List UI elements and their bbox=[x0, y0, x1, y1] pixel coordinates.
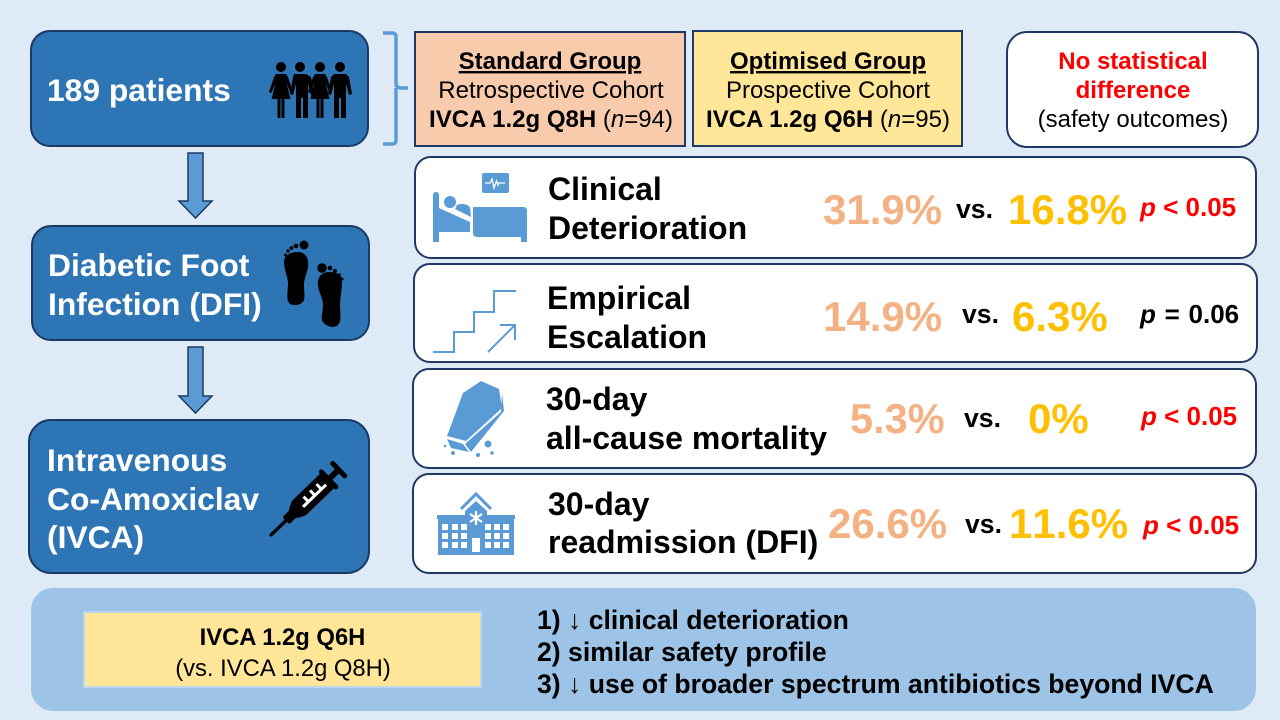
icon: footprints bbox=[284, 240, 344, 327]
label: clinical deterioration: Clinical bbox=[548, 171, 662, 207]
value: optimised: 0% bbox=[1028, 395, 1089, 442]
vs: vs. bbox=[964, 403, 1001, 433]
value: optimised: 11.6% bbox=[1009, 500, 1128, 547]
icon: coffin bbox=[444, 381, 504, 457]
label: 189 patients: 189 patients bbox=[47, 72, 231, 108]
label: intravenous co-amoxiclav: Co-Amoxiclav bbox=[47, 481, 259, 517]
panel: safety outcomes bbox=[1007, 32, 1258, 147]
label: intravenous co-amoxiclav: Intravenous bbox=[47, 442, 227, 478]
text: conclusions list: 1) ↓ clinical deterioration bbox=[537, 605, 849, 635]
panel: optimised group bbox=[693, 31, 962, 146]
text: no statistical difference: difference bbox=[1076, 77, 1190, 104]
vs: vs. bbox=[962, 299, 999, 329]
icon: hospital building bbox=[437, 494, 515, 555]
icon: syringe bbox=[261, 459, 350, 545]
text: optimised group: Prospective Cohort bbox=[726, 77, 930, 104]
vs: vs. bbox=[956, 194, 993, 224]
brace: groups bbox=[383, 33, 408, 144]
text: standard group: Retrospective Cohort bbox=[438, 77, 664, 104]
icon: stairs with arrow bbox=[433, 291, 516, 352]
icon: group of people bbox=[269, 62, 352, 118]
p value: p < 0.05 bbox=[1142, 510, 1239, 540]
panel: standard group bbox=[415, 32, 685, 146]
panel: 30-day readmission bbox=[413, 474, 1256, 573]
label: diabetic foot infection: Infection (DFI) bbox=[48, 286, 262, 322]
text: conclusions list: 2) similar safety profile bbox=[537, 637, 827, 667]
panel: empirical escalation bbox=[414, 264, 1257, 362]
value: optimised: 16.8% bbox=[1008, 186, 1127, 233]
panel: 30-day mortality bbox=[413, 369, 1256, 468]
p value: p < 0.05 bbox=[1139, 192, 1236, 222]
value: standard: 31.9% bbox=[823, 186, 942, 233]
panel: clinical deterioration bbox=[415, 157, 1256, 258]
label: clinical deterioration: Deterioration bbox=[548, 210, 747, 246]
p value: p < 0.05 bbox=[1140, 401, 1237, 431]
label: 30-day all-cause mortality: all-cause mortality bbox=[546, 420, 827, 456]
value: standard: 5.3% bbox=[850, 395, 945, 442]
label: intravenous co-amoxiclav: (IVCA) bbox=[47, 519, 144, 555]
callout: IVCA 1.2g Q6H bbox=[84, 612, 481, 687]
panel: diabetic foot infection bbox=[32, 226, 369, 340]
panel: conclusion bbox=[31, 588, 1256, 711]
label: empirical escalation: Escalation bbox=[547, 319, 707, 355]
label: 30-day all-cause mortality: 30-day bbox=[546, 381, 648, 417]
value: optimised: 6.3% bbox=[1012, 293, 1108, 340]
text: standard group: IVCA 1.2g Q8H (n=94) bbox=[429, 106, 673, 133]
label: diabetic foot infection: Diabetic Foot bbox=[48, 247, 250, 283]
panel: 189 patients bbox=[31, 31, 368, 146]
p value: p = 0.06 bbox=[1139, 299, 1239, 329]
vs: vs. bbox=[965, 509, 1002, 539]
text: optimised group: Optimised Group bbox=[730, 48, 926, 75]
callout: IVCA 1.2g Q6H: IVCA 1.2g Q6H bbox=[200, 624, 365, 651]
panel: intravenous co-amoxiclav bbox=[29, 420, 369, 573]
text: no statistical difference: (safety outcomes) bbox=[1038, 106, 1228, 133]
text: no statistical difference: No statistical bbox=[1058, 48, 1208, 75]
value: standard: 14.9% bbox=[823, 293, 942, 340]
arrow: DFI to IVCA bbox=[179, 347, 212, 413]
label: empirical escalation: Empirical bbox=[547, 280, 691, 316]
arrow: patients to DFI bbox=[179, 153, 212, 218]
label: 30-day readmission: 30-day bbox=[548, 486, 650, 522]
icon: hospital bed with monitor bbox=[433, 173, 527, 242]
text: standard group: Standard Group bbox=[459, 48, 641, 75]
callout: IVCA 1.2g Q6H: (vs. IVCA 1.2g Q8H) bbox=[175, 655, 391, 682]
value: standard: 26.6% bbox=[828, 500, 947, 547]
text: conclusions list: 3) ↓ use of broader spectrum antibiotics beyond IVCA bbox=[537, 669, 1214, 699]
label: 30-day readmission: readmission (DFI) bbox=[548, 524, 818, 560]
text: optimised group: IVCA 1.2g Q6H (n=95) bbox=[706, 106, 950, 133]
